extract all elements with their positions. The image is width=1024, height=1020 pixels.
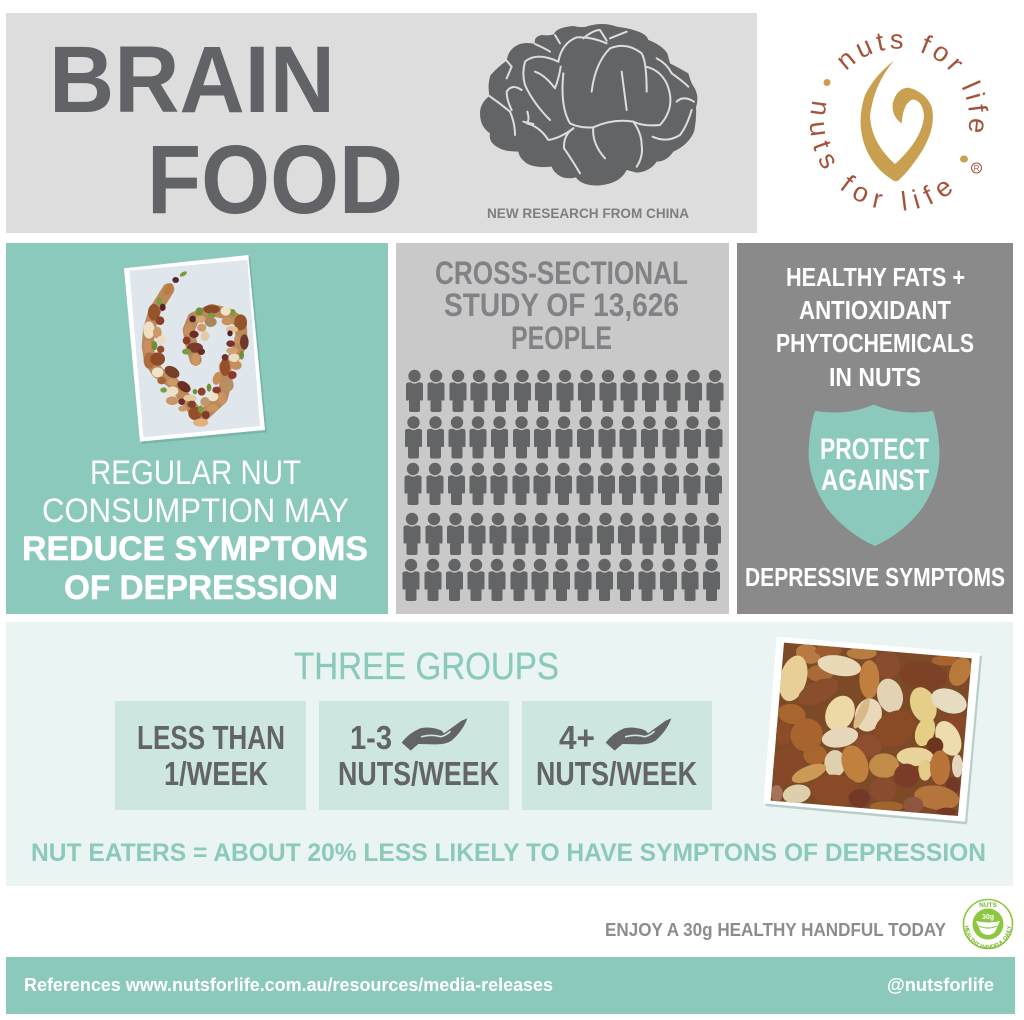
icon: healthy handful badge: 30g bbox=[982, 914, 994, 921]
panel: three groups bbox=[6, 622, 1013, 886]
panel: nut consumption bbox=[6, 243, 388, 614]
title: food: FOOD bbox=[147, 125, 403, 234]
panel: study bbox=[396, 243, 729, 614]
icon: hand bbox=[606, 718, 671, 751]
group: 1-3 nuts/week: NUTS/WEEK bbox=[338, 755, 499, 792]
text: protect against: AGAINST bbox=[821, 464, 929, 497]
text: consumption may: CONSUMPTION MAY bbox=[42, 492, 349, 530]
logo text bottom: nuts for life bbox=[810, 102, 952, 210]
subtitle: NEW RESEARCH FROM CHINA bbox=[487, 206, 689, 221]
text: protect against bbox=[820, 433, 929, 497]
text: references: References www.nutsforlife.com.au/resources/media-releases bbox=[24, 975, 553, 995]
group: 4+ nuts/week: 4+ bbox=[559, 719, 595, 756]
icon: shield bbox=[808, 404, 940, 546]
chart: people pictogram bbox=[402, 370, 724, 601]
panel: footer bbox=[6, 957, 1015, 1014]
text: reduce symptoms: REDUCE SYMPTOMS bbox=[22, 530, 368, 568]
group: less than 1/week: LESS THAN bbox=[137, 719, 285, 756]
title: brain: BRAIN bbox=[49, 27, 335, 133]
group: 1-3 nuts/week bbox=[319, 701, 509, 810]
heading: study size: CROSS-SECTIONAL bbox=[435, 255, 688, 291]
logo dots bbox=[824, 79, 968, 162]
photo: nut heart bbox=[124, 255, 267, 444]
text: nut eaters finding: NUT EATERS = ABOUT 20% LESS LIKELY TO HAVE SYMPTONS OF DEPRESSION bbox=[31, 839, 986, 867]
text: regular nut: REGULAR NUT bbox=[90, 454, 301, 492]
text: healthy handful tagline: ENJOY A 30g HEALTHY HANDFUL TODAY bbox=[605, 920, 946, 940]
text: of depression: OF DEPRESSION bbox=[64, 569, 338, 607]
text: healthy fats: PHYTOCHEMICALS bbox=[776, 328, 974, 358]
icon: healthy handful badge bbox=[962, 898, 1014, 950]
icon: brain bbox=[480, 24, 697, 186]
heading: study size bbox=[435, 255, 688, 356]
registered mark: R bbox=[974, 164, 980, 173]
group: 4+ nuts/week: NUTS/WEEK bbox=[536, 755, 697, 792]
logo text top: nuts for life bbox=[838, 33, 988, 132]
heading: study size: PEOPLE bbox=[511, 320, 612, 356]
icon: hand bbox=[402, 718, 467, 751]
group: less than 1/week bbox=[115, 701, 306, 810]
heading: three groups: THREE GROUPS bbox=[294, 646, 559, 688]
text: healthy fats: HEALTHY FATS + bbox=[786, 262, 965, 292]
icon: healthy handful badge: NUTS bbox=[979, 902, 998, 909]
group: 4+ nuts/week bbox=[522, 701, 712, 810]
text: social handle: @nutsforlife bbox=[887, 975, 994, 995]
photo: mixed nuts bbox=[763, 637, 982, 824]
text: healthy fats bbox=[776, 262, 974, 392]
group: 1-3 nuts/week: 1-3 bbox=[350, 719, 392, 756]
group: less than 1/week: 1/WEEK bbox=[164, 755, 268, 792]
panel: header bbox=[6, 13, 757, 234]
text: healthy fats: ANTIOXIDANT bbox=[799, 295, 951, 325]
text: healthy fats: IN NUTS bbox=[829, 362, 921, 392]
heading: study size: STUDY OF 13,626 bbox=[444, 287, 679, 323]
text: protect against: PROTECT bbox=[820, 433, 929, 466]
panel: healthy fats bbox=[737, 243, 1013, 614]
registered mark bbox=[972, 163, 982, 173]
icon: healthy handful badge: HEALTHY HANDFUL DAILY bbox=[964, 926, 1011, 949]
logo: nuts for life bbox=[810, 33, 988, 210]
logo swirl bbox=[861, 61, 933, 181]
